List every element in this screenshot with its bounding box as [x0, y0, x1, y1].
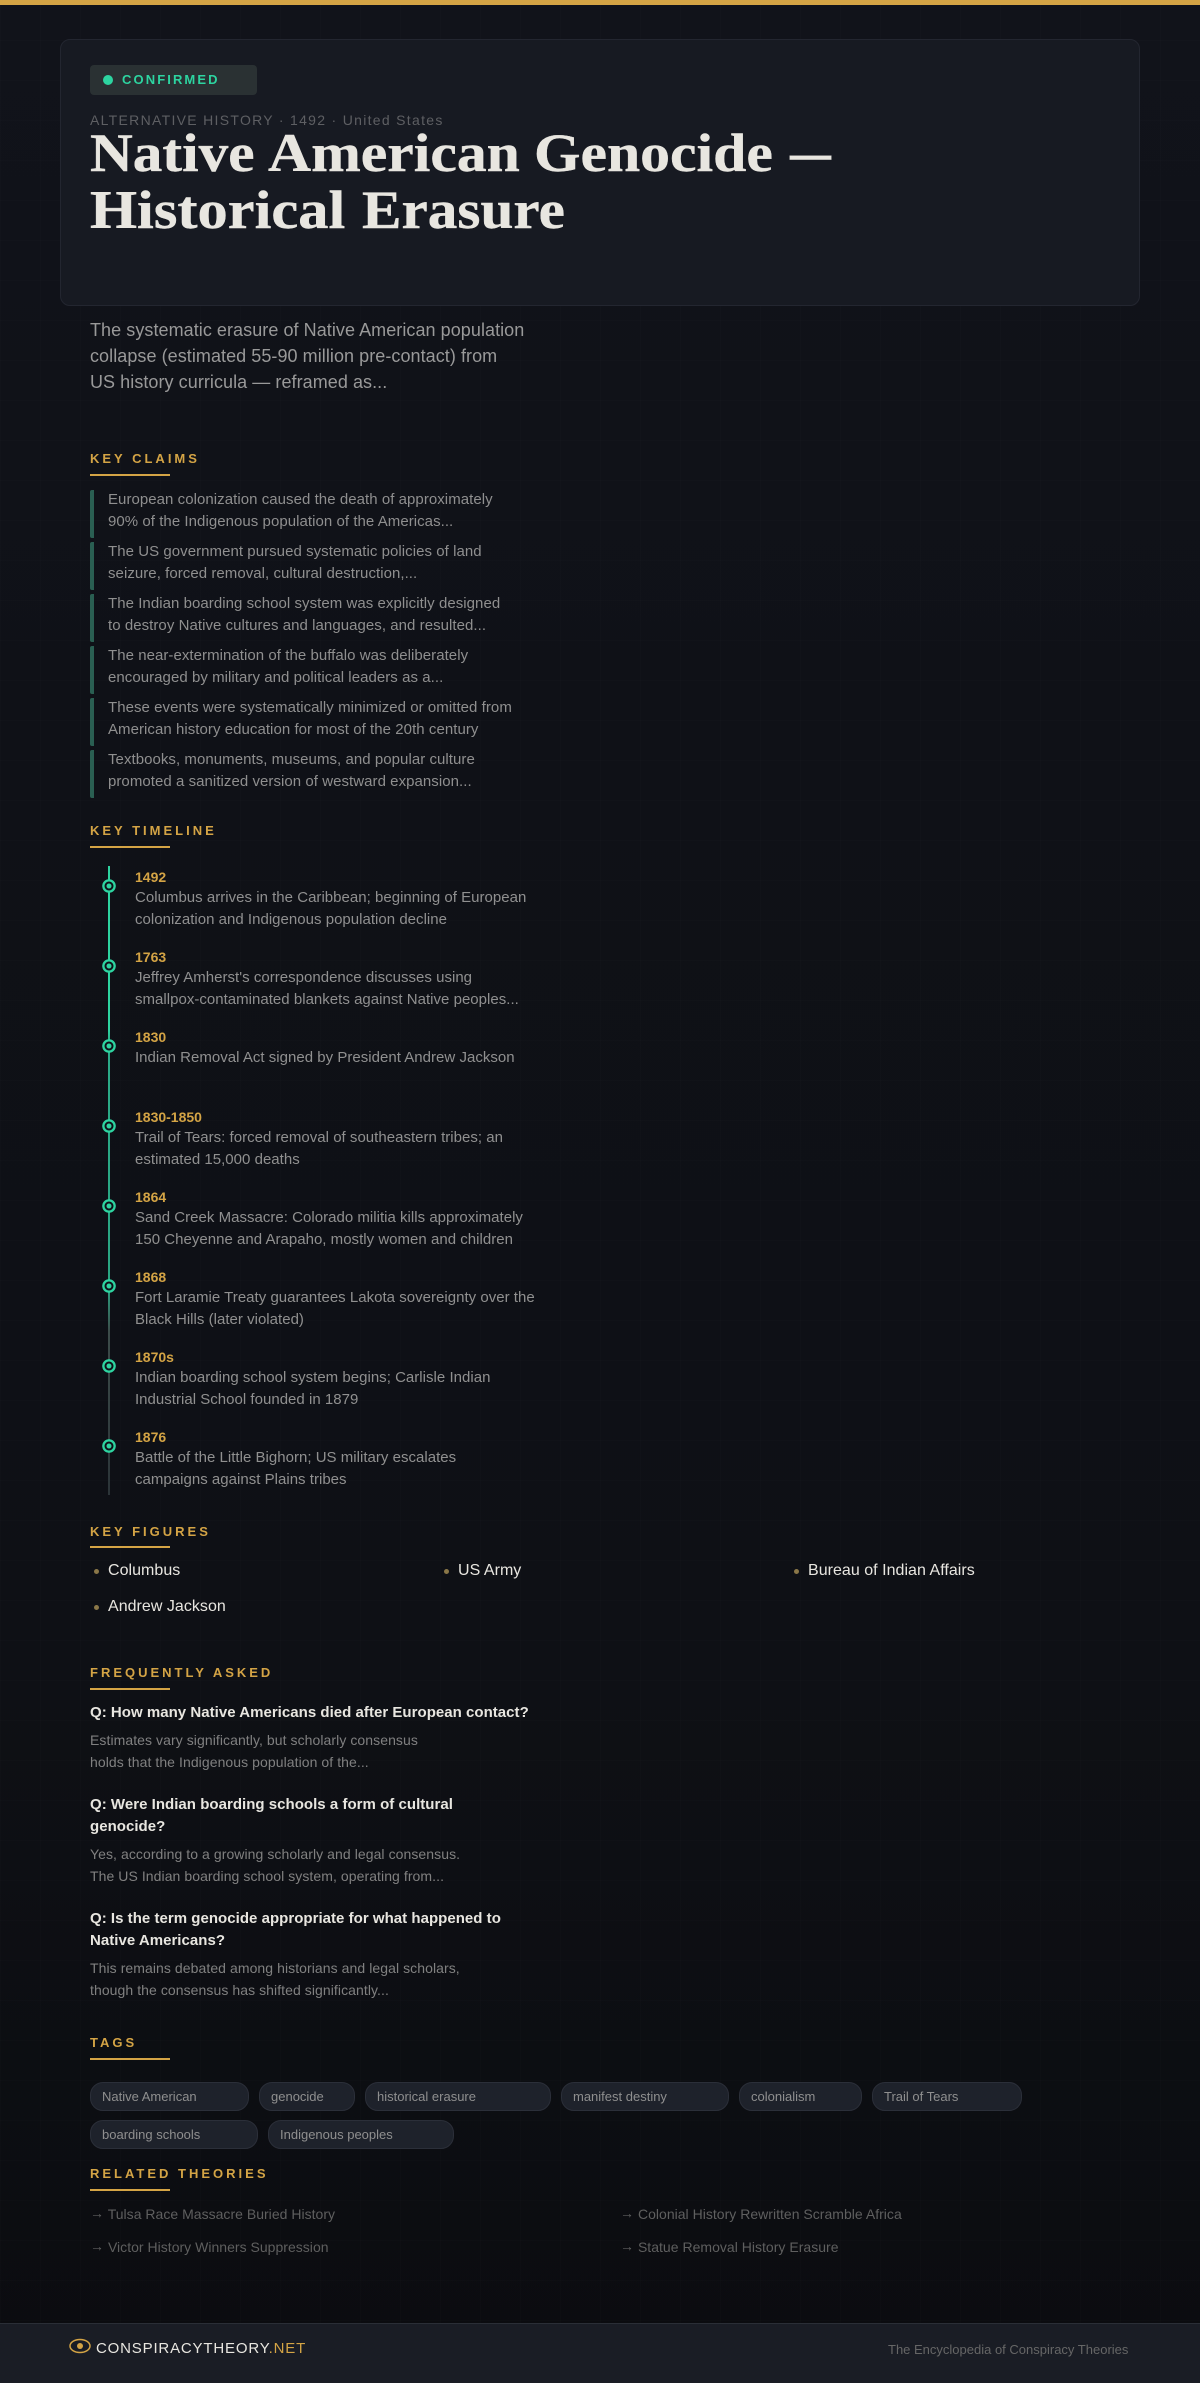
- heading: key claims: KEY CLAIMS: [90, 451, 200, 466]
- tag: Trail of Tears: [884, 2089, 958, 2104]
- marker: [102, 1359, 116, 1373]
- summary text: The systematic erasure of Native American population: [90, 320, 524, 340]
- year: 1830: [135, 1029, 166, 1045]
- panel: FAQ: [90, 1704, 529, 1998]
- year: 1763: [135, 949, 166, 965]
- answer 1: holds that the Indigenous population of the...: [90, 1754, 369, 1770]
- heading: key timeline: KEY TIMELINE: [90, 823, 217, 838]
- claim 5: These events were systematically minimized or omitted from: [108, 699, 512, 716]
- answer 3: though the consensus has shifted significantly...: [90, 1982, 389, 1998]
- claim 6: promoted a sanitized version of westward expansion...: [108, 773, 472, 790]
- marker: [102, 1119, 116, 1133]
- marker: [102, 1039, 116, 1053]
- year: 1868: [135, 1269, 166, 1285]
- event: 1830-1850: [102, 1109, 503, 1168]
- event: 1876: [102, 1429, 456, 1488]
- category line: ALTERNATIVE HISTORY · 1492 · United States: [90, 112, 444, 128]
- figure: Columbus: Columbus: [108, 1562, 180, 1579]
- description: [135, 1449, 456, 1488]
- tag: historical erasure: [377, 2089, 476, 2104]
- year: 1876: [135, 1429, 166, 1445]
- description: Industrial School founded in 1879: [135, 1391, 358, 1408]
- claim 6: Textbooks, monuments, museums, and popular culture: [108, 751, 475, 768]
- brand wordmark: CONSPIRACYTHEORY.NET: [96, 2340, 306, 2357]
- claim 4: encouraged by military and political leaders as a...: [108, 669, 443, 686]
- description: Battle of the Little Bighorn; US military escalates: [135, 1449, 456, 1466]
- claim 4: [90, 646, 570, 694]
- panel: key claims: [90, 490, 512, 798]
- related link: → Statue Removal History Erasure: [620, 2238, 839, 2255]
- footer tagline: The Encyclopedia of Conspiracy Theories: [888, 2342, 1128, 2357]
- top accent bar: [0, 0, 1200, 5]
- question 2: [90, 1796, 453, 1835]
- year: 1864: [135, 1189, 166, 1205]
- summary text: [90, 320, 524, 392]
- event: 1864: [102, 1189, 523, 1248]
- title: Native: [90, 123, 254, 183]
- question 2: genocide?: [90, 1818, 165, 1835]
- claim 3: The Indian boarding school system was explicitly designed: [108, 595, 500, 612]
- claim 5: American history education for most of the 20th century: [108, 721, 478, 738]
- description: [135, 1289, 535, 1328]
- answer 3: [90, 1960, 460, 1998]
- tag: [365, 2082, 551, 2111]
- badge label: CONFIRMED: [122, 72, 220, 87]
- heading: key figures: KEY FIGURES: [90, 1524, 211, 1539]
- description: campaigns against Plains tribes: [135, 1471, 347, 1488]
- icon: eye logo: [69, 2338, 91, 2354]
- tag: [739, 2082, 862, 2111]
- description: 150 Cheyenne and Arapaho, mostly women and children: [135, 1231, 513, 1248]
- question 3: Q: Is the term genocide appropriate for what happened to: [90, 1910, 501, 1927]
- tag: [268, 2120, 454, 2149]
- claim 2: [90, 542, 570, 590]
- description: colonization and Indigenous population decline: [135, 911, 447, 928]
- description: Columbus arrives in the Caribbean; beginning of European: [135, 889, 526, 906]
- event: 1830: [102, 1029, 515, 1066]
- description: [135, 1209, 523, 1248]
- year: 1492: [135, 869, 166, 885]
- answer 1: [90, 1732, 418, 1770]
- title: —: [790, 122, 831, 182]
- tag: Native American: [102, 2089, 197, 2104]
- title: Historical: [90, 180, 345, 240]
- description: Trail of Tears: forced removal of southeastern tribes; an: [135, 1129, 503, 1146]
- description: [135, 969, 519, 1008]
- panel: tags: [90, 2082, 1022, 2149]
- tag: [90, 2082, 249, 2111]
- description: [135, 1129, 503, 1168]
- year: 1870s: [135, 1349, 174, 1365]
- panel: key figures: [94, 1562, 975, 1615]
- tag: [561, 2082, 729, 2111]
- description: Sand Creek Massacre: Colorado militia kills approximately: [135, 1209, 523, 1226]
- icon: status dot: [103, 75, 113, 85]
- panel: hero header: [60, 39, 1140, 306]
- marker: [102, 1199, 116, 1213]
- panel: related theories: [90, 2204, 902, 2255]
- claim 6: [90, 750, 570, 798]
- question 2: Q: Were Indian boarding schools a form of cultural: [90, 1796, 453, 1813]
- figure: US Army: US Army: [458, 1562, 521, 1579]
- timeline line: [108, 866, 110, 1495]
- tag: colonialism: [751, 2089, 815, 2104]
- description: Black Hills (later violated): [135, 1311, 304, 1328]
- title: [90, 122, 832, 240]
- status badge: [90, 65, 257, 95]
- tag: [259, 2082, 355, 2111]
- question 1: Q: How many Native Americans died after European contact?: [90, 1704, 529, 1721]
- title: American: [268, 123, 520, 183]
- event: 1868: [102, 1269, 535, 1328]
- description: estimated 15,000 deaths: [135, 1151, 300, 1168]
- figure: Andrew Jackson: Andrew Jackson: [108, 1598, 226, 1615]
- marker: [102, 959, 116, 973]
- description: Jeffrey Amherst's correspondence discusses using: [135, 969, 472, 986]
- title: Erasure: [362, 180, 565, 240]
- claim 5: [90, 698, 570, 746]
- answer 2: [90, 1846, 460, 1884]
- answer 2: Yes, according to a growing scholarly and legal consensus.: [90, 1846, 460, 1862]
- description: [135, 889, 526, 928]
- answer 1: Estimates vary significantly, but scholarly consensus: [90, 1732, 418, 1748]
- marker: [102, 879, 116, 893]
- answer 3: This remains debated among historians and legal scholars,: [90, 1960, 460, 1976]
- claim 3: to destroy Native cultures and languages, and resulted...: [108, 617, 486, 634]
- heading: frequently asked: FREQUENTLY ASKED: [90, 1665, 273, 1680]
- claim 3: [90, 594, 570, 642]
- panel: timeline: [102, 866, 535, 1495]
- claim 2: seizure, forced removal, cultural destruction,...: [108, 565, 417, 582]
- tag: manifest destiny: [573, 2089, 667, 2104]
- claim 1: 90% of the Indigenous population of the Americas...: [108, 513, 453, 530]
- claim 4: The near-extermination of the buffalo was deliberately: [108, 647, 468, 664]
- tag: boarding schools: [102, 2127, 200, 2142]
- related link: → Tulsa Race Massacre Buried History: [90, 2204, 335, 2222]
- related link: → Colonial History Rewritten Scramble Africa: [620, 2204, 902, 2222]
- description: Indian Removal Act signed by President Andrew Jackson: [135, 1049, 515, 1066]
- heading: tags: TAGS: [90, 2035, 137, 2050]
- event: 1870s: [102, 1349, 490, 1408]
- year: 1830-1850: [135, 1109, 202, 1125]
- question 3: Native Americans?: [90, 1932, 225, 1949]
- footer: [0, 2323, 1200, 2383]
- description: Fort Laramie Treaty guarantees Lakota sovereignty over the: [135, 1289, 535, 1306]
- tag: genocide: [271, 2089, 324, 2104]
- tag: [90, 2120, 258, 2149]
- title: Genocide: [534, 123, 773, 183]
- heading: related theories: RELATED THEORIES: [90, 2166, 268, 2181]
- question 3: [90, 1910, 501, 1949]
- claim 2: The US government pursued systematic policies of land: [108, 543, 482, 560]
- answer 2: The US Indian boarding school system, operating from...: [90, 1868, 444, 1884]
- tag: [872, 2082, 1022, 2111]
- summary text: US history curricula — reframed as...: [90, 372, 387, 392]
- event: 1492: [102, 869, 526, 928]
- tag: Indigenous peoples: [280, 2127, 393, 2142]
- summary text: collapse (estimated 55-90 million pre-contact) from: [90, 346, 497, 366]
- claim 1: [90, 490, 570, 538]
- claim 1: European colonization caused the death of approximately: [108, 491, 493, 508]
- marker: [102, 1279, 116, 1293]
- description: Indian boarding school system begins; Carlisle Indian: [135, 1369, 490, 1386]
- description: [135, 1369, 490, 1408]
- description: smallpox-contaminated blankets against Native peoples...: [135, 991, 519, 1008]
- figure: Bureau of Indian Affairs: Bureau of Indian Affairs: [808, 1562, 975, 1579]
- related link: → Victor History Winners Suppression: [90, 2238, 329, 2255]
- event: 1763: [102, 949, 519, 1008]
- marker: [102, 1439, 116, 1453]
